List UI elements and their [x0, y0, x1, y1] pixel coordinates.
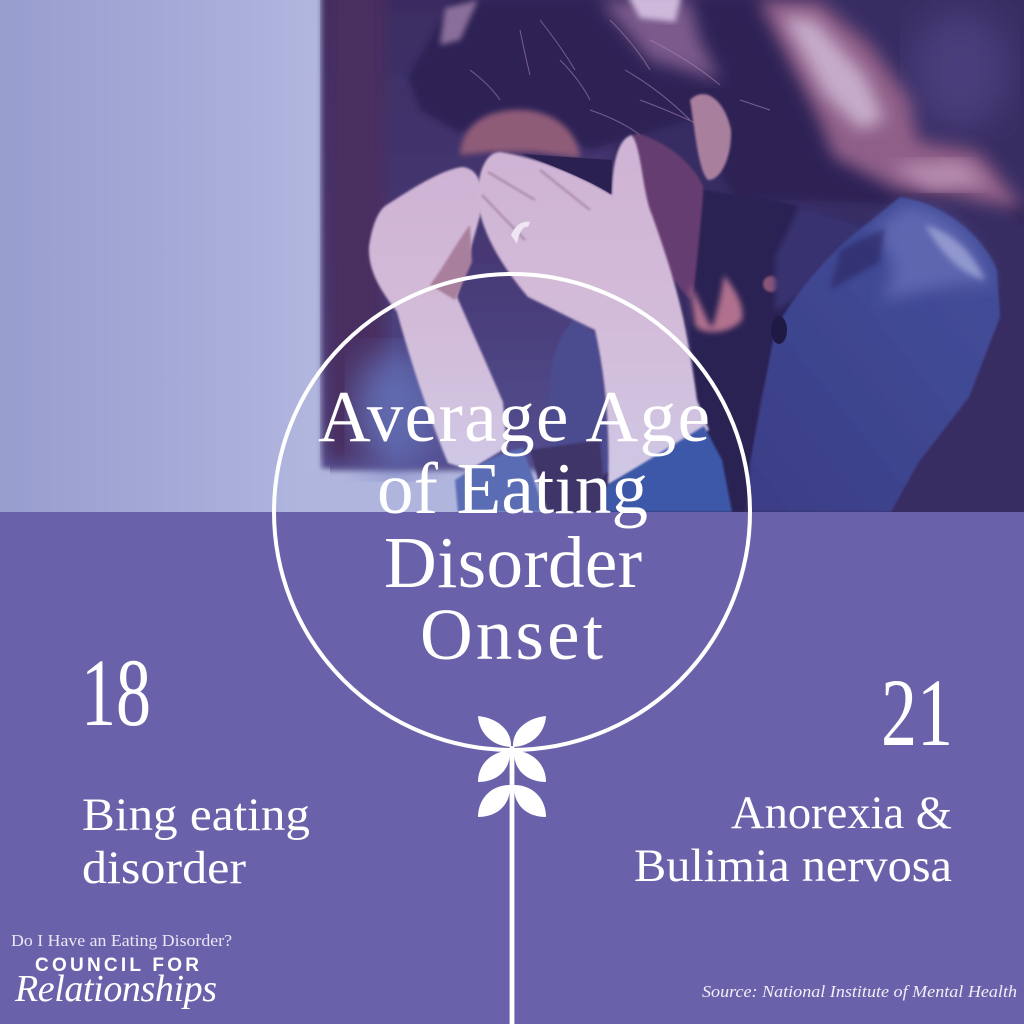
jacket seen between arms — [550, 320, 608, 476]
stat: 21: 21 — [881, 659, 953, 766]
logo: Council for Relationships: COUNCIL FOR — [35, 955, 199, 976]
title: Onset — [420, 594, 603, 675]
title: Disorder — [384, 522, 642, 603]
title — [318, 376, 710, 675]
label: binge eating disorder — [82, 789, 310, 894]
blue sleeves — [455, 448, 545, 512]
lower purple panel — [0, 512, 1024, 1024]
ring — [511, 222, 530, 244]
circle outline — [274, 274, 750, 750]
collar and undershirt — [690, 190, 798, 512]
source note: Source: National Institute of Mental Health — [702, 982, 1017, 1001]
stat: 18: 18 — [81, 639, 151, 746]
title: of Eating — [377, 448, 648, 529]
label: anorexia and bulimia nervosa — [634, 787, 952, 892]
eye shadow under hand — [522, 154, 612, 194]
face and ear — [633, 132, 704, 300]
logo: Council for Relationships: Relationships — [14, 968, 217, 1010]
left hand and forearm — [369, 167, 507, 470]
caption: page question: Do I Have an Eating Disorder? — [11, 931, 232, 950]
right hand and forearm — [478, 135, 709, 485]
label: binge eating disorder: Bing eating — [82, 789, 310, 841]
label: binge eating disorder: disorder — [82, 842, 246, 894]
jacket shoulder — [748, 197, 1000, 512]
label: anorexia and bulimia nervosa: Bulimia nervosa — [634, 840, 952, 892]
stem and leaves icon — [478, 716, 546, 1024]
title: Average Age — [318, 376, 710, 457]
forehead — [460, 110, 580, 158]
photo: woman covering her face — [0, 0, 1024, 540]
label: anorexia and bulimia nervosa: Anorexia & — [731, 787, 952, 839]
